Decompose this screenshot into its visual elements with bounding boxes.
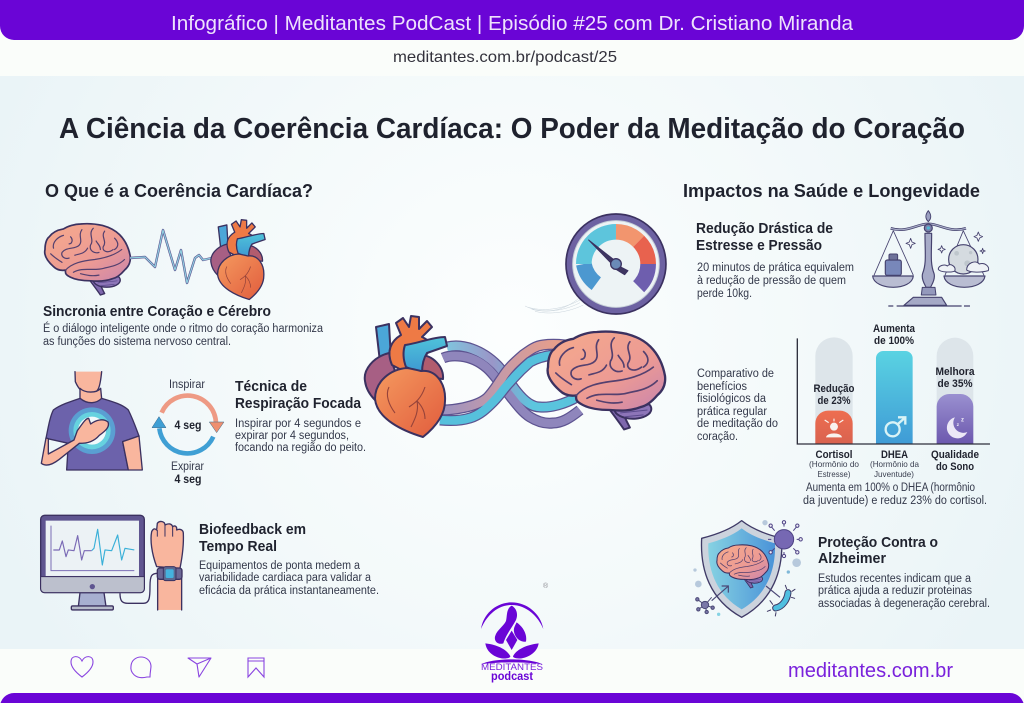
block: sincronia [43,303,324,348]
bar chart: Qualidade [931,449,979,461]
icon: comment [131,657,151,678]
block: reducao de estresse: 20 minutos de prática equivalem [697,262,854,274]
breathing cycle diagram: 4 seg [174,472,202,486]
bacterium [767,585,795,616]
icon: moon and z: z [957,422,960,428]
block: biofeedback: Tempo Real [199,538,277,555]
text: chart caption [803,482,987,507]
icon: bookmark [248,658,264,677]
block: biofeedback: variabilidade cardiaca para validar a [199,572,372,584]
illustration: brain wave heart [45,220,265,300]
title: A Ciência da Coerência Cardíaca: O Poder da Meditação do Coração [59,113,965,145]
block: reducao de estresse: à redução de pressão de quem [697,275,846,287]
episode url: meditantes.com.br/podcast/25 [393,49,617,66]
bar chart: de 35% [938,378,973,390]
bar chart: Cortisol [816,449,852,461]
footer strip [0,649,1024,693]
text: comparativo de beneficios: de meditação do [697,418,778,430]
heading: left column: O Que é a Coerência Cardíaca? [45,180,313,201]
block: sincronia: Sincronia entre Coração e Cérebro [43,303,271,320]
block: protecao contra alzheimer: associadas à degeneração cerebral. [818,598,990,610]
bar chart: DHEA [881,449,908,461]
icon: heart [71,657,93,677]
illustration: person hand on chest [41,372,142,470]
block: protecao contra alzheimer: Estudos recentes indicam que a [818,573,972,585]
icon: stress person [825,419,843,437]
text: comparativo de beneficios: benefícios [697,381,747,393]
block: sincronia: É o diálogo inteligente onde o ritmo do coração harmoniza [43,322,324,335]
breathing cycle diagram: Expirar [171,461,204,473]
block: sincronia: as funções do sistema nervoso central. [43,336,231,348]
central illustration: heart and brain infinity [365,316,665,437]
icon: moon and z [947,417,967,438]
text: comparativo de beneficios: Comparativo de [697,368,774,380]
breathing cycle diagram [152,379,224,486]
block: biofeedback: Biofeedback em [199,521,306,538]
block: reducao de estresse: perde 10kg. [697,288,752,300]
illustration: monitor and wrist sensor [41,515,183,610]
logo [481,602,543,683]
block: tecnica de respiracao: Técnica de [235,378,307,395]
breathing cycle diagram: 4 seg [174,418,202,432]
bar chart: (Hormônio do [809,459,859,469]
block: protecao contra alzheimer: prática ajuda a reduzir proteinas [818,585,972,597]
bar chart: Melhora [936,366,975,378]
logo: podcast [491,671,533,683]
block: tecnica de respiracao: Inspirar por 4 segundos e [235,418,361,430]
logo: MEDITANTES [481,662,543,673]
block: tecnica de respiracao: Respiração Focada [235,395,362,412]
block: reducao de estresse: Redução Drástica de [696,220,833,237]
block: reducao de estresse: Estresse e Pressão [696,237,822,254]
text: chart caption: Aumenta em 100% o DHEA (hormônio [806,482,975,494]
bottom bar [0,693,1024,703]
bar chart: de 100% [874,335,914,347]
block: protecao contra alzheimer: Proteção Contra o [818,534,938,551]
block: tecnica de respiracao [235,378,366,454]
virus [768,521,802,558]
text: chart caption: da juventude) e reduz 23% do cortisol. [803,495,987,507]
illustration: balance scale [873,211,989,306]
bar chart [797,323,990,479]
breathing cycle diagram: Inspirar [169,379,205,391]
bar chart: (Hormônio da [870,459,919,469]
gauge [525,214,666,314]
icon: moon and z: z [961,417,964,423]
text: comparativo de beneficios [697,368,778,443]
header bar: Infográfico | Meditantes PodCast | Episódio #25 com Dr. Cristiano Miranda [171,13,854,35]
registered mark: ® [543,582,549,590]
text: comparativo de beneficios: fisiológicos da [697,393,767,405]
bar chart: do Sono [936,461,974,473]
block: tecnica de respiracao: focando na região do peito. [235,442,366,454]
bar chart: Estresse) [818,469,851,479]
bar chart: Aumenta [873,323,916,335]
icon: male symbol [886,417,905,436]
bar chart: de 23% [818,395,851,407]
block: biofeedback: Equipamentos de ponta medem a [199,560,361,572]
footer website: meditantes.com.br [788,660,953,682]
block: protecao contra alzheimer: Alzheimer [818,550,886,567]
illustration: shield with brain [693,520,802,617]
block: biofeedback: eficácia da prática instantaneamente. [199,585,379,597]
icon: send [188,658,211,677]
bar chart: Juventude) [874,469,914,479]
block: protecao contra alzheimer [818,534,990,610]
block: reducao de estresse [696,220,854,300]
header bar [0,0,1024,40]
text: comparativo de beneficios: prática regular [697,406,767,418]
bar chart: Redução [814,383,855,395]
molecule [696,597,714,614]
heading: right column: Impactos na Saúde e Longevidade [683,180,980,201]
block: tecnica de respiracao: expirar por 4 segundos, [235,430,349,442]
block: biofeedback [199,521,379,597]
text: comparativo de beneficios: coração. [697,431,738,443]
